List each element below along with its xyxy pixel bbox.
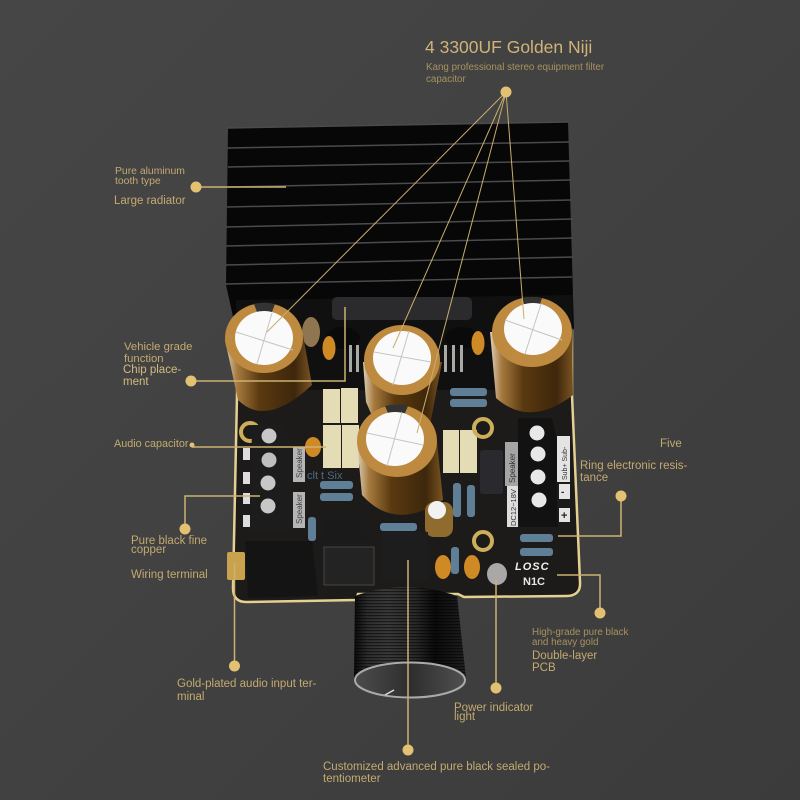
small orange capacitors bbox=[305, 331, 484, 579]
audio input jack bbox=[227, 541, 318, 598]
callout: gold-plated input: Gold-plated audio input ter- bbox=[177, 678, 317, 690]
right terminal block bbox=[505, 418, 570, 527]
potentiometer knob bbox=[354, 587, 466, 698]
callout: ring resistance: tance bbox=[580, 472, 608, 484]
callout: chip placement bbox=[123, 307, 345, 388]
callout: PCB bbox=[532, 575, 628, 674]
callout: audio capacitor bbox=[114, 438, 326, 450]
callout: pure black copper: Pure black fine bbox=[131, 535, 207, 547]
callout: golden capacitors bbox=[267, 37, 605, 433]
header connector bbox=[324, 547, 374, 585]
callout: PCB: Double-layer bbox=[532, 650, 597, 662]
gold rings bbox=[241, 419, 492, 550]
callout: gold-plated input: minal bbox=[177, 691, 204, 703]
callout: potentiometer bbox=[323, 560, 550, 785]
callout: gold-plated input bbox=[177, 563, 317, 703]
op amp chip bbox=[322, 513, 367, 540]
right terminal block: DC12~18V bbox=[509, 489, 518, 526]
callout: potentiometer: Customized advanced pure black sealed po- bbox=[323, 761, 550, 773]
right terminal block: Speaker bbox=[508, 453, 517, 483]
callout: ring resistance: Five bbox=[660, 438, 682, 450]
capacitor 3 bbox=[490, 297, 573, 412]
callout: pure black copper: Wiring terminal bbox=[131, 569, 208, 581]
callout: golden capacitors: 4 3300UF Golden Niji bbox=[425, 37, 592, 57]
right terminal block: + bbox=[561, 510, 567, 522]
logo text: LOSC bbox=[515, 561, 550, 573]
circuit board: N1C bbox=[523, 576, 545, 588]
callout: ring resistance bbox=[558, 438, 688, 536]
diode bbox=[480, 450, 503, 494]
capacitor 4 bbox=[357, 404, 443, 515]
callout: golden capacitors: capacitor bbox=[426, 74, 466, 85]
callout: radiator: tooth type bbox=[115, 176, 161, 187]
resistors bbox=[308, 388, 553, 574]
callout: radiator: Pure aluminum bbox=[115, 166, 185, 177]
callout: pure black copper: copper bbox=[131, 544, 166, 556]
callout: PCB: High-grade pure black bbox=[532, 627, 628, 638]
callout: power indicator bbox=[454, 580, 533, 723]
small capacitor bbox=[425, 501, 453, 537]
capacitor 2 bbox=[363, 325, 442, 425]
capacitor 1 bbox=[225, 303, 312, 411]
heatsink radiator bbox=[226, 122, 574, 330]
transistors bbox=[326, 327, 479, 372]
indicator LED bbox=[487, 563, 507, 585]
right terminal block: - bbox=[561, 487, 564, 498]
potentiometer body bbox=[382, 532, 428, 580]
callout: power indicator: Power indicator bbox=[454, 702, 533, 714]
callout: PCB: PCB bbox=[532, 662, 556, 674]
film capacitors bbox=[323, 388, 477, 473]
callout: chip placement: function bbox=[124, 353, 164, 365]
left terminal block: Speaker bbox=[295, 494, 304, 524]
right terminal block: Sub+ Sub- bbox=[562, 446, 569, 480]
callout: ring resistance: Ring electronic resis- bbox=[580, 460, 688, 472]
callout: PCB: and heavy gold bbox=[532, 637, 598, 648]
callout: potentiometer: tentiometer bbox=[323, 773, 381, 785]
callout: chip placement: Chip place- bbox=[123, 364, 181, 376]
callout: chip placement: Vehicle grade bbox=[124, 341, 192, 353]
left terminal block: Speaker bbox=[295, 448, 304, 478]
chip bbox=[332, 297, 472, 320]
callout: power indicator: light bbox=[454, 711, 476, 723]
callout: pure black copper bbox=[131, 496, 260, 581]
circuit board bbox=[225, 295, 580, 602]
left terminal block bbox=[243, 425, 305, 533]
callout: radiator bbox=[114, 166, 286, 207]
callout: golden capacitors: Kang professional stereo equipment filter bbox=[426, 62, 605, 73]
callout: radiator: Large radiator bbox=[114, 195, 186, 207]
callout: chip placement: ment bbox=[123, 376, 149, 388]
callout: audio capacitor: Audio capacitor bbox=[114, 438, 189, 450]
circuit board: clt t Six bbox=[307, 470, 343, 482]
